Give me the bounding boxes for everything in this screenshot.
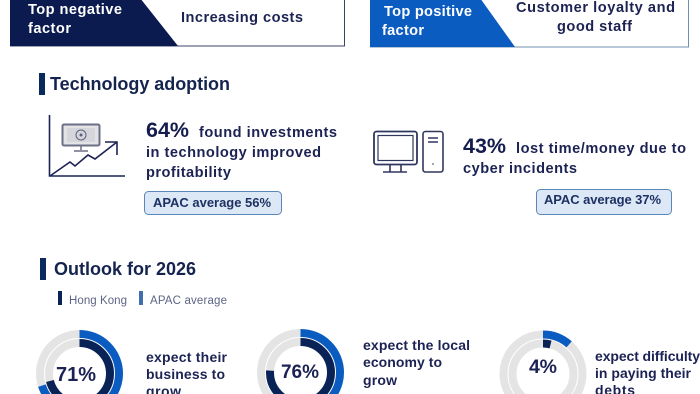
stat: 64 percent improved profitability: found investments (199, 125, 337, 141)
label: expect business to grow: expect their (146, 349, 228, 365)
icon: desktop computer and tower (374, 132, 443, 172)
panel: top negative factor: factor (28, 21, 71, 37)
label: expect difficulty paying debts: in paying their (595, 365, 692, 381)
label: expect business to grow (146, 349, 228, 394)
panel: top positive factor: Top positive (384, 4, 472, 20)
label: expect local economy to grow: grow (363, 372, 397, 388)
legend: Hong Kong (69, 295, 127, 307)
donut chart: business growth 71%: 71% (56, 364, 96, 386)
panel: top positive factor: Customer loyalty and (516, 0, 675, 16)
heading: outlook for 2026: Outlook for 2026 (54, 259, 196, 279)
heading: technology adoption: Technology adoption (50, 74, 230, 94)
stat: 43 percent cyber incidents: cyber incidents (463, 161, 577, 177)
callout: APAC average 37%: APAC average 37% (544, 192, 661, 207)
panel: top negative factor (10, 0, 344, 46)
callout: APAC average 56%: APAC average 56% (153, 195, 271, 210)
label: expect difficulty paying debts: expect difficulty (595, 348, 700, 364)
callout: APAC average 56% (144, 192, 282, 214)
label: expect local economy to grow (363, 337, 470, 388)
stat: 64 percent improved profitability: 64% (146, 118, 189, 142)
donut chart: debt difficulty 4% (504, 334, 582, 394)
icon: monitor with rising chart (50, 115, 125, 176)
panel: top negative factor: Top negative (28, 2, 122, 18)
panel: top positive factor (370, 0, 688, 47)
panel: top positive factor: factor (382, 23, 424, 39)
legend: APAC average (150, 295, 227, 307)
legend (58, 291, 227, 307)
panel: top positive factor: good staff (557, 19, 632, 35)
stat: 43 percent cyber incidents: 43% (463, 134, 506, 158)
stat: 64 percent improved profitability: profitability (146, 165, 232, 181)
panel: top negative factor: Increasing costs (181, 10, 303, 26)
stat: 64 percent improved profitability: in technology improved (146, 145, 321, 161)
donut chart: local economy growth 76%: 76% (281, 362, 319, 383)
label: expect difficulty paying debts (595, 348, 700, 394)
stat: 43 percent cyber incidents: lost time/money due to (516, 141, 686, 157)
donut chart: local economy growth 76% (261, 333, 340, 394)
donut chart: business growth 71% (40, 334, 119, 394)
label: expect local economy to grow: expect the local (363, 337, 470, 353)
stat: 43 percent cyber incidents (463, 134, 686, 177)
donut chart: debt difficulty 4%: 4% (529, 356, 557, 378)
stat: 64 percent improved profitability (146, 118, 337, 181)
label: expect business to grow: business to (146, 366, 225, 382)
label: expect local economy to grow: economy to (363, 354, 442, 370)
callout: APAC average 37% (536, 190, 672, 214)
